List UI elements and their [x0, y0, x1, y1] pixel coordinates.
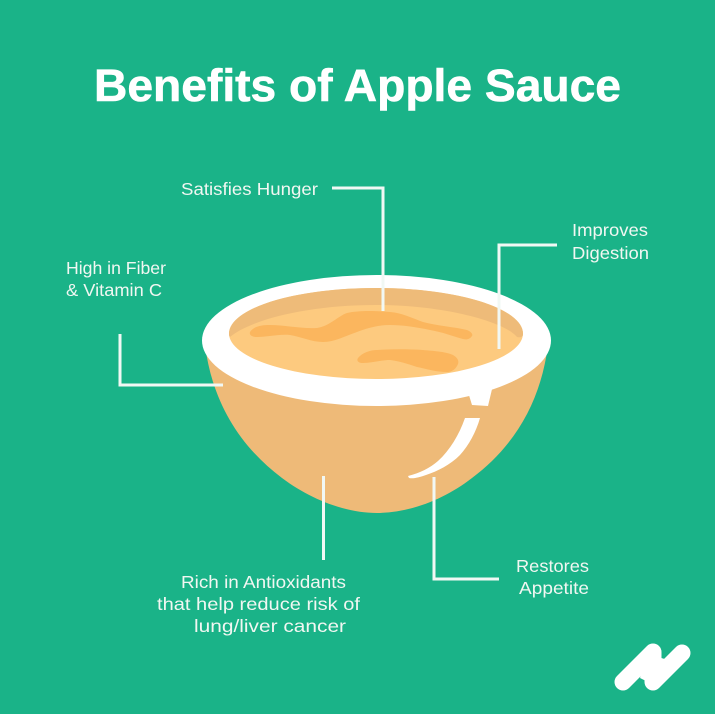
label: Rich in Antioxidants: lung/liver cancer — [194, 616, 346, 636]
bowl illustration — [202, 275, 551, 513]
logo — [623, 652, 682, 686]
label: High in Fiber and Vitamin C — [66, 258, 223, 385]
bowl body — [205, 345, 548, 513]
label: Rich in Antioxidants: that help reduce risk of — [157, 594, 360, 614]
label: Satisfies Hunger: Satisfies Hunger — [181, 179, 318, 199]
label: Improves Digestion: Digestion — [572, 243, 649, 263]
label: Restores Appetite: Restores — [516, 556, 589, 576]
label: Restores Appetite: Appetite — [519, 578, 589, 598]
title: Benefits of Apple Sauce — [94, 60, 621, 111]
inner bowl shadow — [229, 288, 523, 337]
sauce swirl top — [250, 311, 472, 342]
sauce surface — [229, 288, 523, 379]
label: High in Fiber and Vitamin C: High in Fiber — [66, 258, 166, 278]
bowl highlight — [408, 418, 480, 478]
sauce swirl bottom — [357, 349, 458, 372]
label: Improves Digestion — [499, 220, 649, 349]
label: Restores Appetite — [434, 477, 589, 598]
label: High in Fiber and Vitamin C: & Vitamin C — [66, 280, 162, 300]
label: Rich in Antioxidants — [157, 476, 360, 636]
label: Satisfies Hunger — [181, 179, 383, 311]
rim highlight notch — [468, 385, 493, 406]
bowl rim — [202, 275, 551, 406]
label: Rich in Antioxidants: Rich in Antioxidants — [181, 572, 346, 592]
label: Improves Digestion: Improves — [572, 220, 648, 240]
